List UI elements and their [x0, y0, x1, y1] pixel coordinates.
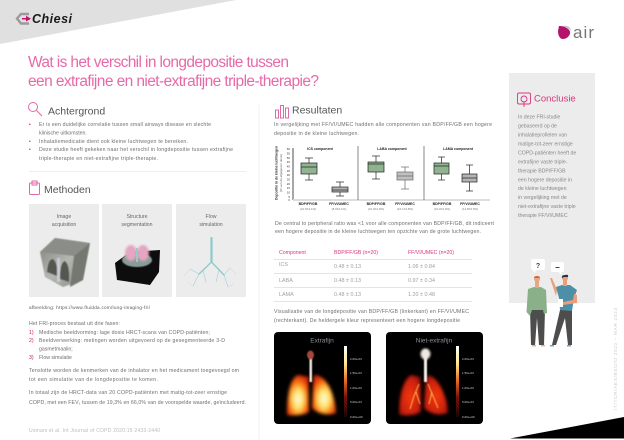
table header: FF/VI/UMEC (n=20) [408, 250, 454, 256]
box plot chart: (21.0±4.0%) [368, 207, 384, 211]
conclusion text: extrafijne vaste triple- [518, 160, 568, 166]
colour scale: 2.00e-03 [350, 357, 362, 361]
conclusion text: niet-extrafijne vaste triple [518, 204, 576, 210]
text: central-to-peripheral ratio [275, 221, 495, 235]
bullet list: • [29, 139, 31, 145]
text: visualisation description [274, 309, 469, 324]
chart titles [307, 147, 474, 151]
card: flow simulation: Flow [206, 214, 217, 220]
x axis labels: FF/VI/UMEC [395, 202, 415, 206]
conclusion text: therapie FF/VI/UMEC [518, 213, 568, 219]
person: blue shirt [550, 275, 577, 346]
colour scale: 1.00e-03 [462, 386, 474, 390]
text block: method description: Flow simulatie [39, 355, 72, 361]
title [28, 54, 319, 90]
heat map: Extrafijn: Extrafijn [310, 338, 334, 344]
card: structure segmentation: segmentation [121, 222, 153, 228]
card: image acquisition [29, 204, 99, 297]
heading: Conclusie: Conclusie [534, 94, 576, 104]
icon: bars [276, 106, 288, 118]
conclusion text: In deze FRI-studie [518, 114, 560, 120]
icon: clipboard [30, 181, 40, 194]
title: een extrafijne en niet-extrafijne triple-therapie? [28, 73, 319, 90]
table rows: 0.48 ± 0.13 [334, 292, 361, 298]
y axis ticks: 15 [287, 186, 290, 190]
caption: image source: afbeelding: https://www.fluidda.com/lung-imaging-fri/ [29, 305, 151, 310]
heading: Achtergrond: Achtergrond [48, 106, 105, 118]
title: Wat is het verschil in longdepositie tussen [28, 54, 289, 71]
ICS boxes [301, 158, 348, 196]
colour scale: 1.50e-03 [462, 371, 474, 375]
table rows: LABA [279, 278, 293, 284]
table header: BDP/FF/GB (n=20) [334, 250, 378, 256]
text: central-to-peripheral ratio: een hogere depositie in de kleine luchtwegen ten opzichte van de grote luchtwegen. [275, 229, 481, 235]
lungs [399, 348, 448, 415]
heading: Resultaten: Resultaten [292, 104, 342, 116]
bullet list: triple-therapie en niet-extrafijne triple-therapie. [39, 156, 158, 162]
text block: method description: Medische beeldvorming: lage dosis HRCT-scans van COPD-patiënten; [39, 330, 210, 336]
bottom-right black corner shape [510, 417, 624, 438]
speech bubble: answer [551, 262, 564, 275]
top-left grey header shape [0, 0, 236, 44]
bullet list: Inhalatiemedicatie dient ook kleine luchtwegen te bereiken. [39, 139, 188, 145]
text block: method description [29, 321, 246, 406]
text block: method description: 2) [29, 338, 34, 344]
text: central-to-peripheral ratio: De central to peripheral ratio was <1 voor alle componenten van BDP/FF/GB, dit indiceert [275, 221, 495, 227]
bullet list: • [29, 147, 31, 153]
table rows: 1.06 ± 0.84 [408, 264, 435, 270]
colour scale: 0.00e+00 [462, 415, 475, 419]
panel: Resultaten [274, 104, 495, 424]
card: structure segmentation: Structure [126, 214, 148, 220]
speech bubble: question mark: ? [536, 263, 540, 270]
table rows: 0.48 ± 0.13 [334, 278, 361, 284]
bullet list: Er is een duidelijke correlatie tussen small airways disease en slechte [39, 122, 211, 128]
colour scale: 2.00e-03 [462, 357, 474, 361]
y axis ticks: 60 [287, 147, 290, 151]
text block: method description: Het FRI-proces bestaat uit drie fasen: [29, 321, 120, 327]
conclusion text: COPD-patiënten heeft de [518, 150, 576, 156]
bullet list: • [29, 122, 31, 128]
table rows: LAMA [279, 292, 294, 298]
citation: Usmani et al. Int Journal of COPD 2020:15 2433-2440 [29, 428, 160, 434]
card: image acquisition: Image [57, 214, 71, 220]
table rows: 0.97 ± 0.34 [408, 278, 435, 284]
heat map: Niet-extrafijn: Niet-extrafijn [416, 338, 453, 344]
conclusion text: de kleine luchtwegen [518, 186, 567, 192]
y axis ticks [287, 147, 290, 202]
x axis labels: FF/VI/UMEC [460, 202, 480, 206]
conclusion text: therapie BDP/FF/GB [518, 168, 566, 174]
lungs [287, 350, 336, 415]
vertical document code: IT/TCR/AEX/BSO/O 2022 – MAR 2023 [613, 308, 619, 410]
panel: Conclusie [509, 73, 595, 303]
heat map: Niet-extrafijn [386, 332, 483, 424]
text block: method description: gasmetmaalin; [39, 346, 73, 352]
person: green sweater [526, 276, 547, 346]
text block: method description: tot een simulatie van de longdepositie te komen. [29, 377, 158, 383]
colour scale [456, 346, 475, 419]
column divider [258, 105, 260, 440]
card: flow simulation: simulation [199, 222, 223, 228]
intro text: depositie in de kleine luchtwegen. [274, 131, 359, 137]
card: image acquisition: acquisition [52, 222, 76, 228]
box plot chart: (% van de afgegeven dosis) [279, 154, 283, 192]
table header [279, 250, 454, 256]
table rows: 0.48 ± 0.13 [334, 264, 361, 270]
y axis ticks: 20 [287, 182, 290, 186]
heat map: Extrafijn [274, 332, 371, 424]
box plot chart: (21.5±4.1%) [300, 207, 316, 211]
y axis ticks: 40 [287, 164, 290, 168]
CT scan cube [40, 238, 90, 287]
table rows: ICS [279, 262, 288, 268]
text: visualisation description: (rechterkant). De heldergele kleur representeert een hogere longdepositie [274, 318, 460, 324]
y axis ticks: 25 [287, 178, 290, 182]
y axis ticks: 5 [288, 195, 290, 199]
chart titles: ICS component [307, 147, 334, 151]
y axis ticks: 0 [288, 198, 290, 202]
text block: method description: 3) [29, 355, 34, 361]
y axis ticks: 50 [287, 156, 290, 160]
air logo: air [573, 23, 594, 42]
conclusion text: inhalatieprofielen van [518, 132, 567, 138]
text block: method description: Beeldverwerking: metingen worden uitgevoerd op de gesegmenteerde 3-D [39, 338, 225, 344]
icon: lungs in magnifier [518, 93, 530, 107]
table rows [279, 262, 435, 298]
colour scale: 1.00e-03 [350, 386, 362, 390]
panel: Methoden [29, 181, 246, 434]
box plot chart: (21.0±4.0%) [434, 207, 450, 211]
table rows: 1.20 ± 0.48 [408, 292, 435, 298]
colour scale [344, 346, 363, 419]
conclusion text: een hogere depositie in [518, 178, 572, 184]
panel: Achtergrond [28, 102, 233, 162]
table [274, 250, 472, 302]
colour scale: 5.00e-04 [462, 400, 474, 404]
box plot chart: (14.8±3.6%) [462, 207, 478, 211]
table header: Component [279, 250, 306, 256]
intro text: In vergelijking met FF/VI/UMEC hadden alle componenten van BDP/FF/GB een hogere [274, 122, 492, 128]
text block: method description: Tenslotte worden de kenmerken van de inhalator en het medicament toegevoegd om [29, 368, 239, 374]
colour scale: 0.00e+00 [350, 415, 363, 419]
y axis ticks: 55 [287, 151, 290, 155]
x axis labels: FF/VI/UMEC [329, 202, 349, 206]
text block: method description: COPD, met een FEV₁ tussen de 19,3% en 66,0% van de voorspelde waarde, geïncludeerd. [29, 400, 246, 406]
box plot chart: (16.1±3.8%) [397, 207, 413, 211]
bullet list [29, 122, 233, 162]
colour scale: 1.50e-03 [350, 371, 362, 375]
y axis label: Depositie in de kleine luchtwegen [274, 146, 278, 200]
intro text [274, 122, 492, 137]
segmented lung block [115, 245, 160, 285]
x axis labels [299, 202, 480, 206]
conclusion text: in vergelijking met de [518, 195, 567, 201]
illustration: two people talking [526, 259, 577, 346]
chart titles: LABA component [377, 147, 408, 151]
conclusion text [518, 114, 576, 219]
Chiesi logo: Chiesi [32, 12, 73, 26]
text block: method description: 1) [29, 330, 34, 336]
air logo [558, 23, 594, 42]
LABA boxes [368, 156, 413, 189]
bullet list: Deze studie heeft gekeken naar het verschil in longdepositie tussen extrafijne [39, 147, 233, 153]
y axis ticks: 35 [287, 169, 290, 173]
y axis ticks: 30 [287, 173, 290, 177]
y axis ticks: 10 [287, 191, 290, 195]
x axis labels: BDP/FF/GB [433, 202, 452, 206]
chart titles: LAMA component [443, 147, 474, 151]
conclusion text: matige-tot-zeer ernstige [518, 142, 573, 148]
text block: method description: In totaal zijn de HRCT-data van 20 COPD-patiënten met matig-tot-zeer ernstige [29, 390, 227, 396]
colour scale: 5.00e-04 [350, 400, 362, 404]
bullet list: klinische uitkomsten. [39, 130, 87, 136]
text: visualisation description: Visualisatie van de longdepositie van BDP/FF/GB (linkerkant) en FF/VI/UMEC [274, 309, 469, 315]
box plot chart: (8.0±2.1%) [332, 207, 346, 211]
conclusion text: gebaseerd op de [518, 124, 557, 130]
heading: Methoden: Methoden [44, 184, 91, 196]
card: flow simulation [176, 204, 246, 297]
airway tree [184, 238, 236, 287]
card: structure segmentation [102, 204, 172, 297]
icon: magnifier [28, 102, 42, 116]
x axis labels: BDP/FF/GB [299, 202, 318, 206]
LAMA boxes [434, 157, 477, 191]
box plot chart [274, 146, 490, 211]
y axis ticks: 45 [287, 160, 290, 164]
x axis labels: BDP/FF/GB [367, 202, 386, 206]
